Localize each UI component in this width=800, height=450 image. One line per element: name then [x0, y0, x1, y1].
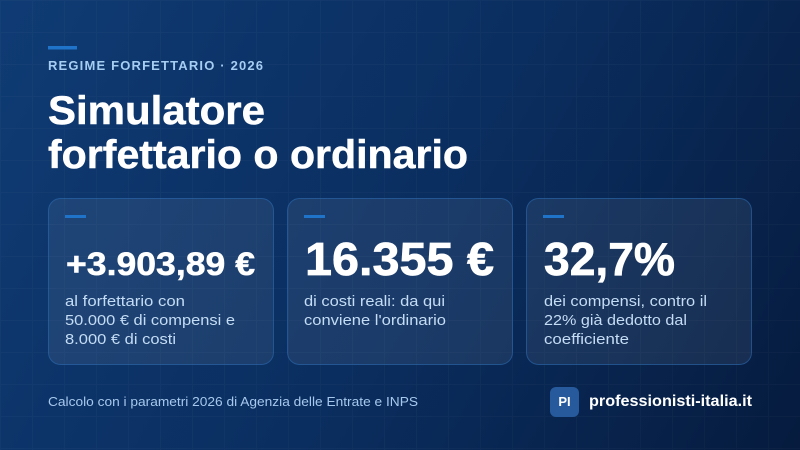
- eyebrow: REGIME FORFETTARIO · 2026: [48, 58, 263, 73]
- title: Simulatore: [48, 89, 265, 133]
- description: [544, 293, 707, 348]
- footer note: Calcolo con i parametri 2026 di Agenzia delle Entrate e INPS: [48, 395, 418, 409]
- brand name: professionisti-italia.it: [589, 393, 753, 410]
- value: 32,7%: [544, 233, 675, 285]
- panel: costs threshold: [288, 198, 512, 364]
- description: conviene l'ordinario: [304, 312, 446, 329]
- card accent: [543, 215, 564, 218]
- logo badge: [550, 387, 579, 417]
- logo badge: PI: [558, 394, 571, 409]
- panel: percentage: [526, 198, 752, 364]
- description: 22% già dedotto dal: [544, 312, 687, 329]
- value: 16.355 €: [305, 233, 494, 285]
- title: [48, 89, 468, 177]
- description: 8.000 € di costi: [65, 331, 176, 348]
- description: di costi reali: da qui: [304, 293, 445, 310]
- panel: forfettario advantage: [48, 198, 274, 364]
- value: +3.903,89 €: [66, 246, 255, 282]
- description: [65, 293, 235, 348]
- accent bar: [48, 46, 77, 50]
- description: 50.000 € di compensi e: [65, 312, 235, 329]
- card accent: [304, 215, 325, 218]
- description: dei compensi, contro il: [544, 293, 707, 310]
- description: al forfettario con: [65, 293, 185, 310]
- title: forfettario o ordinario: [48, 133, 468, 177]
- description: [304, 293, 446, 329]
- card accent: [65, 215, 86, 218]
- description: coefficiente: [544, 331, 629, 348]
